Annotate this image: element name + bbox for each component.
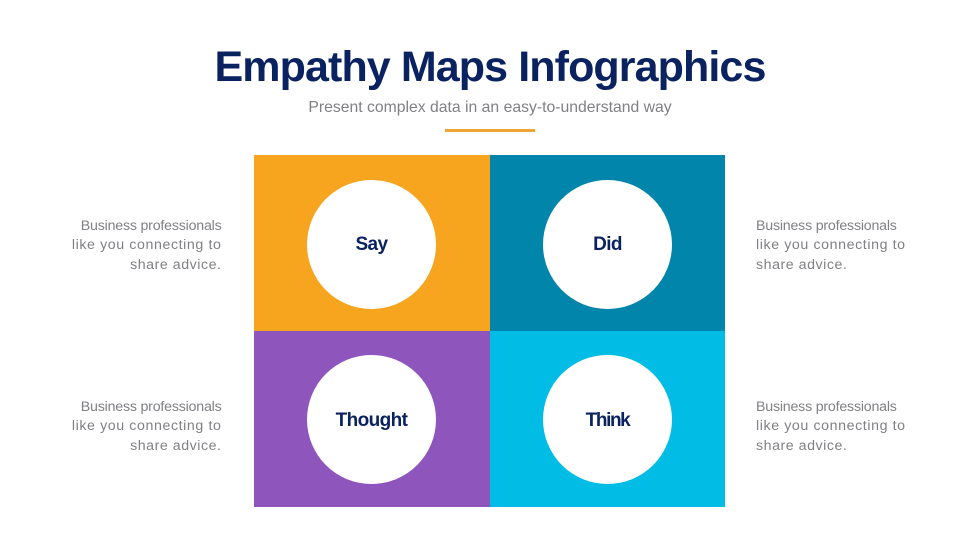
text: bottom right description: share advice. <box>756 438 847 454</box>
text: bottom right description: Business professionals <box>756 399 897 415</box>
panel: think <box>490 331 725 507</box>
circle: did: Did <box>593 234 622 255</box>
circle: say: Say <box>355 234 388 255</box>
accent underline <box>445 129 535 132</box>
text: bottom left description: like you connecting to <box>72 418 222 434</box>
text: top right description <box>756 218 906 273</box>
text: top left description <box>72 218 222 273</box>
circle: thought <box>307 355 436 484</box>
circle: thought: Thought <box>336 410 407 431</box>
panel: say <box>254 155 490 331</box>
circle: think <box>543 355 672 484</box>
circle: did <box>543 180 672 309</box>
text: top right description: like you connecting to <box>756 237 906 253</box>
circle: think: Think <box>586 410 629 431</box>
text: bottom right description <box>756 399 906 454</box>
text: bottom left description: share advice. <box>130 438 222 454</box>
panel: thought <box>254 331 490 507</box>
text: bottom left description <box>72 399 222 454</box>
text: bottom right description: like you connecting to <box>756 418 906 434</box>
text: bottom left description: Business professionals <box>81 399 222 415</box>
text: top right description: Business professionals <box>756 218 897 234</box>
text: top left description: Business professionals <box>81 218 222 234</box>
text: top left description: share advice. <box>130 257 222 273</box>
circle: say <box>307 180 436 309</box>
subtitle: Present complex data in an easy-to-understand way <box>308 98 672 116</box>
text: top left description: like you connecting to <box>72 237 222 253</box>
title: Empathy Maps Infographics <box>215 42 765 90</box>
panel: did <box>490 155 725 331</box>
text: top right description: share advice. <box>756 257 847 273</box>
